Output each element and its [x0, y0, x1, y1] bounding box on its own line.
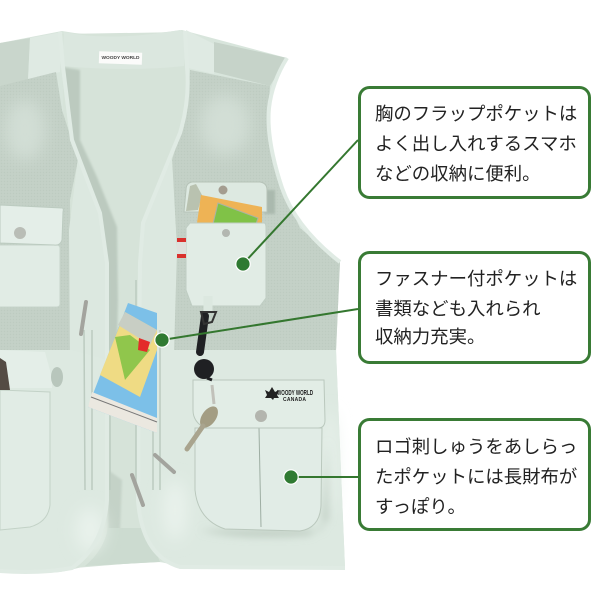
map in zip pocket: [88, 303, 157, 433]
right shoulder strip: [186, 30, 214, 74]
upper left pocket: [0, 205, 63, 307]
vest silhouette base: [0, 30, 345, 573]
leader: logo pocket callout: [284, 470, 358, 484]
right shoulder mesh: [214, 42, 287, 86]
callout: chest flap pocket: 胸のフラップポケットは: [375, 103, 577, 124]
collar band: [62, 30, 186, 69]
shadow behind pocket: [264, 190, 275, 214]
callout: logo pocket: ロゴ刺しゅうをあしらっ: [375, 436, 577, 457]
flap: [193, 380, 325, 428]
pocket shadow: [200, 440, 328, 537]
zipper tracks: [84, 280, 160, 490]
lower left pocket: [0, 350, 63, 530]
pocket body: [195, 428, 322, 531]
neck label: [99, 51, 142, 65]
reel key holder and key: [187, 296, 222, 449]
marker dot: [236, 257, 250, 271]
flap opened: [184, 182, 267, 212]
snap: [255, 410, 267, 422]
snaps: [218, 186, 228, 194]
inner neck shadow: [63, 67, 118, 350]
callout: logo pocket: すっぽり。: [375, 496, 466, 517]
callout: logo pocket: たポケットには長財布が: [375, 466, 577, 487]
callout: chest flap pocket: などの収納に便利。: [375, 163, 541, 184]
callout: zip pocket: 収納力充実。: [375, 326, 485, 347]
orange wallet: [197, 195, 262, 223]
marker dot: [155, 333, 169, 347]
callout: chest flap pocket: よく出し入れするスマホ: [375, 133, 577, 154]
chest flap pocket: [177, 182, 275, 306]
key: [196, 403, 222, 431]
green card: [213, 203, 258, 224]
pocket body: [186, 223, 266, 306]
left lower body: [0, 350, 108, 571]
right placket: [138, 158, 177, 352]
lower body folds: [76, 410, 336, 552]
center pleat: [259, 428, 261, 527]
neck and armhole binding: [0, 31, 345, 572]
lower back shadow: [108, 470, 122, 545]
right mesh panel: [172, 70, 340, 352]
callout: chest flap pocket: [360, 88, 590, 198]
vest back lining: [62, 32, 190, 568]
red tag: [177, 238, 186, 258]
left placket: [69, 158, 108, 360]
right lower body: [138, 350, 345, 568]
callout: zip pocket: 書類なども入れられ: [375, 298, 541, 319]
center zip pulls: [132, 455, 174, 505]
left shoulder strip: [28, 32, 62, 80]
callout: zip pocket: ファスナー付ポケットは: [375, 268, 577, 289]
left mesh panel: [0, 72, 78, 352]
neck label: WOODY WORLD: [101, 55, 140, 61]
embroidered logo: WOODY WORLD: [277, 390, 313, 397]
bottom right pocket: [193, 380, 328, 537]
vest photo illustration: [0, 30, 345, 573]
left zip pull: [81, 302, 86, 334]
strap: [204, 296, 212, 312]
reel: [194, 359, 214, 379]
marker dot: [284, 470, 298, 484]
embroidered logo: CANADA: [283, 397, 306, 403]
leader: zip pocket callout: [155, 309, 358, 347]
lower back hem: [85, 528, 160, 566]
callout: logo pocket: [360, 420, 590, 530]
mesh highlights: [5, 95, 250, 160]
callout: zip pocket: [360, 252, 590, 362]
embroidered logo: [265, 387, 313, 403]
leader: chest pocket callout: [236, 140, 358, 271]
left shoulder mesh: [0, 38, 30, 86]
